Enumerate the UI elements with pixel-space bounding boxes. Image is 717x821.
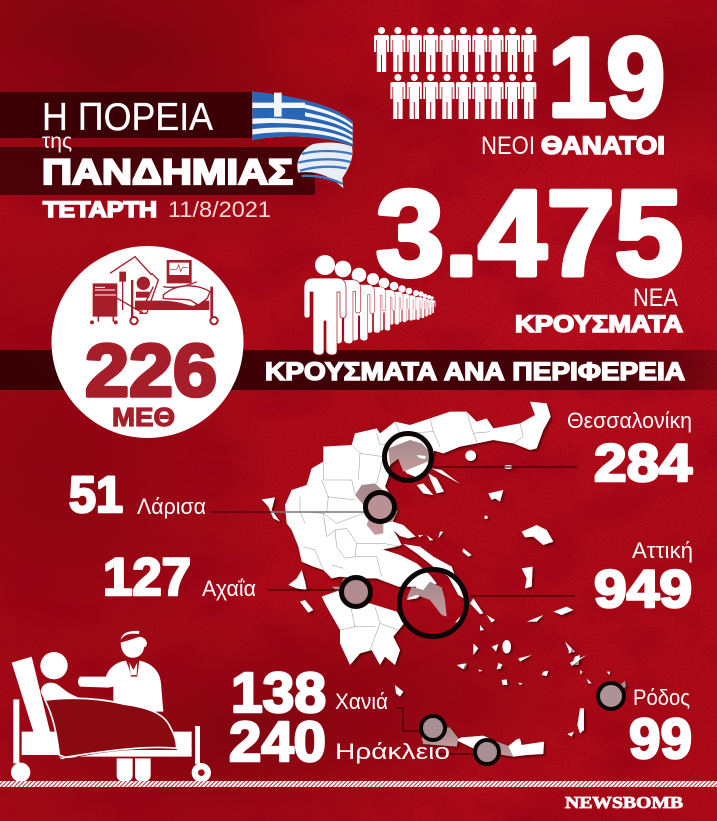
Larissa label: 51 xyxy=(69,466,123,523)
Attica label xyxy=(594,538,693,619)
Achaia label: 127 xyxy=(103,548,191,607)
Evia xyxy=(403,544,464,598)
Heraklion label xyxy=(229,710,450,774)
Chania label: 138 xyxy=(231,661,326,725)
icon: queue of people xyxy=(304,255,436,355)
Attica label: Αττική xyxy=(632,538,693,563)
date: 11/8/2021 xyxy=(168,197,271,222)
patient xyxy=(41,683,97,712)
Achaia label xyxy=(103,548,256,607)
deaths number: 19 xyxy=(548,15,665,140)
title block xyxy=(0,92,315,222)
cases label: ΝΕΑ xyxy=(633,284,678,312)
ICU number: 226 xyxy=(85,329,217,412)
leader lines xyxy=(210,467,577,754)
Peloponnese xyxy=(322,590,404,665)
Chalkidiki xyxy=(417,468,460,495)
Chania label xyxy=(231,661,388,725)
Rhodes label: Ρόδος xyxy=(633,685,690,710)
blanket xyxy=(45,698,177,757)
nurse xyxy=(121,631,139,640)
logo: Newsbomb: NEWSBOMB xyxy=(565,793,683,812)
backrest and head xyxy=(12,657,59,755)
rails and wheels xyxy=(13,699,19,763)
cases label xyxy=(515,284,683,338)
Thessaloniki label xyxy=(567,408,693,493)
deaths label: ΘΑΝΑΤΟΙ xyxy=(541,132,665,160)
Thessaloniki label: Θεσσαλονίκη xyxy=(567,408,692,433)
ICU label: ΜΕΘ xyxy=(112,402,175,432)
Dodecanese, Cyclades and Crete xyxy=(395,642,626,757)
Chania label: Χανιά xyxy=(335,689,388,714)
bed frame xyxy=(59,750,192,759)
Larissa label: Λάρισα xyxy=(137,494,206,519)
mainland xyxy=(285,402,551,587)
deaths label: ΝΕΟΙ xyxy=(481,132,535,160)
Heraklion label: Ηράκλειο xyxy=(335,739,450,764)
Achaia label: Αχαΐα xyxy=(202,576,256,601)
date: ΤΕΤΑΡΤΗ xyxy=(43,197,157,222)
Attica label: 949 xyxy=(594,560,692,619)
Rhodes label: 99 xyxy=(629,707,692,771)
map of Greece xyxy=(262,402,626,757)
region borders xyxy=(300,412,523,650)
icon: Greek flag ribbon xyxy=(252,92,353,188)
title line 2: της xyxy=(42,130,72,153)
Thessaloniki label: 284 xyxy=(594,434,693,493)
icon: patient and nurse xyxy=(11,631,211,782)
highlighted regions xyxy=(388,440,433,472)
icon: ICU bed xyxy=(90,257,218,324)
cases label: ΚΡΟΥΣΜΑΤΑ xyxy=(515,311,683,338)
cases number: 3.475 xyxy=(376,165,683,301)
panel: ICU circle xyxy=(52,246,244,438)
Heraklion label: 240 xyxy=(229,710,326,774)
icon: 19 deaths figures xyxy=(374,27,536,119)
footer stripe xyxy=(0,781,717,787)
regional band xyxy=(0,350,717,390)
title line 1: Η ΠΟΡΕΙΑ xyxy=(42,96,213,139)
Aegean and Ionian islands xyxy=(470,598,483,614)
regional heading: ΚΡΟΥΣΜΑΤΑ ΑΝΑ ΠΕΡΙΦΕΡΕΙΑ xyxy=(265,358,685,386)
region markers xyxy=(342,434,624,764)
Attica xyxy=(407,575,437,600)
Larissa label xyxy=(69,466,206,523)
title line 3: ΠΑΝΔΗΜΙΑΣ xyxy=(42,153,293,192)
